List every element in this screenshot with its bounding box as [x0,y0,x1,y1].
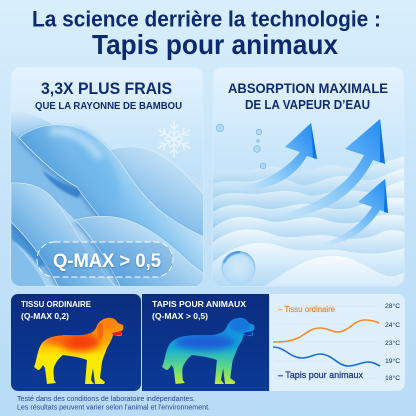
fluffy waves [213,156,404,290]
title: Tapis pour animaux [92,29,339,60]
footnote [17,394,210,412]
icon: snowflake [156,121,192,157]
title: La science derrière la technologie : [32,6,381,32]
arrow 1 [231,123,317,190]
arrow 2 [264,119,385,217]
title [32,6,381,60]
curve: pet mat [273,347,380,366]
fabric strands [11,112,207,290]
label [21,299,91,321]
panel: cooling fabric [11,67,207,290]
label: TAPIS POUR ANIMAUX [152,299,246,309]
callout: Q-MAX badge [37,242,173,277]
label [152,299,246,321]
temperature axis: 28°C [385,302,400,310]
callout: Q-MAX badge: Q-MAX > 0,5 [53,250,161,272]
label: (Q-MAX 0,2) [21,311,69,321]
temperature axis: 19°C [385,357,400,365]
temperature axis [385,302,400,382]
icon: large water drop [222,251,256,285]
legend: pet mat: – Tapis pour animaux [278,370,363,380]
subheading: DE LA VAPEUR D’EAU [245,98,370,112]
footnote: Les résultats peuvent varier selon l'animal et l'environnement. [17,402,210,412]
panel: temperature line chart [270,294,405,391]
hot dog silhouette [34,318,124,384]
cool dog silhouette [162,318,254,384]
heading: 3,3X PLUS FRAIS [41,79,172,98]
label: (Q-MAX > 0,5) [152,311,208,321]
panel: pet mat thermal image [142,294,269,391]
label: TISSU ORDINAIRE [21,299,91,309]
temperature axis: 23°C [385,339,400,347]
footnote: Testé dans des conditions de laboratoire indépendantes. [17,394,195,403]
legend: ordinary fabric: – Tissu ordinaire [278,305,336,314]
arrow 3 [316,179,388,245]
temperature axis: 18°C [385,374,400,382]
panel: water vapour absorption [213,67,404,290]
subheading: QUE LA RAYONNE DE BAMBOU [35,100,182,112]
temperature axis: 24°C [385,321,400,329]
curve: ordinary fabric [273,320,379,342]
heading: ABSORPTION MAXIMALE [228,80,388,96]
water bubbles [216,124,266,169]
panel: ordinary fabric thermal image [11,294,141,391]
